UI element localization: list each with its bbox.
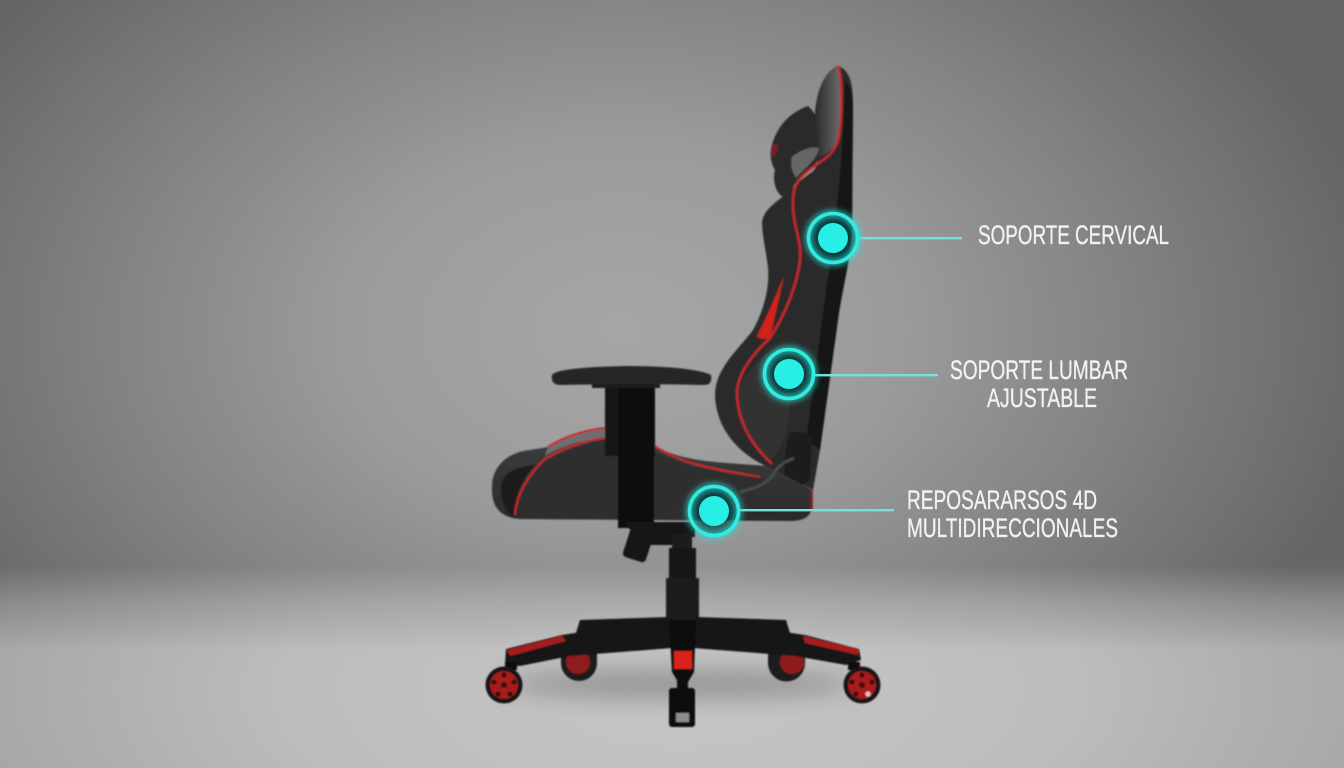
- right leg red insert: [803, 636, 859, 655]
- hinge strap: [740, 458, 794, 492]
- label: [950, 355, 1128, 413]
- label: [907, 485, 1118, 543]
- label: MULTIDIRECCIONALES: [907, 513, 1118, 543]
- label: AJUSTABLE: [987, 383, 1097, 413]
- label: REPOSARARSOS 4D: [907, 485, 1097, 515]
- left front caster: [486, 662, 522, 704]
- side bracket: [785, 432, 812, 487]
- armrest: [552, 366, 711, 528]
- rear base legs: [576, 617, 790, 637]
- label: SOPORTE CERVICAL: [978, 220, 1169, 250]
- centre leg: [669, 620, 696, 682]
- seat mechanism: [625, 522, 695, 545]
- right rear caster: [768, 650, 805, 682]
- hotspot: [764, 349, 814, 399]
- floor shadow: [505, 669, 855, 699]
- callout: reposabrazos: [689, 485, 1118, 543]
- red piping seat: [515, 427, 760, 515]
- backrest shading: [806, 80, 853, 450]
- seat front recess: [501, 465, 535, 517]
- red wedge: [757, 276, 784, 339]
- seat side panel: [520, 438, 765, 520]
- centre leg red insert: [674, 651, 692, 669]
- right front caster: [844, 662, 880, 704]
- leader line: [739, 509, 894, 511]
- left rear caster: [561, 650, 597, 681]
- leader line: [858, 237, 962, 239]
- headrest cushion: [771, 106, 823, 197]
- gaming chair: [486, 66, 880, 727]
- leader line: [814, 374, 938, 376]
- height lever knob: [622, 527, 654, 563]
- hotspot: [808, 213, 858, 263]
- callout: soporte lumbar: [764, 349, 1128, 413]
- seat upper highlight: [545, 427, 617, 456]
- backrest: [715, 66, 853, 490]
- gas column: [666, 534, 699, 624]
- front base legs: [505, 618, 861, 682]
- centre front caster: [669, 678, 695, 727]
- label: SOPORTE LUMBAR: [950, 355, 1128, 385]
- red rear edge: [811, 490, 813, 510]
- left leg red insert: [507, 636, 566, 656]
- callout: soporte cervical: [808, 213, 1169, 263]
- upper wing panel: [815, 66, 841, 158]
- lumbar highlight: [739, 345, 790, 460]
- hotspot: [689, 486, 739, 536]
- red piping backrest: [737, 66, 842, 464]
- seat: [492, 427, 812, 521]
- floor: [0, 565, 1344, 768]
